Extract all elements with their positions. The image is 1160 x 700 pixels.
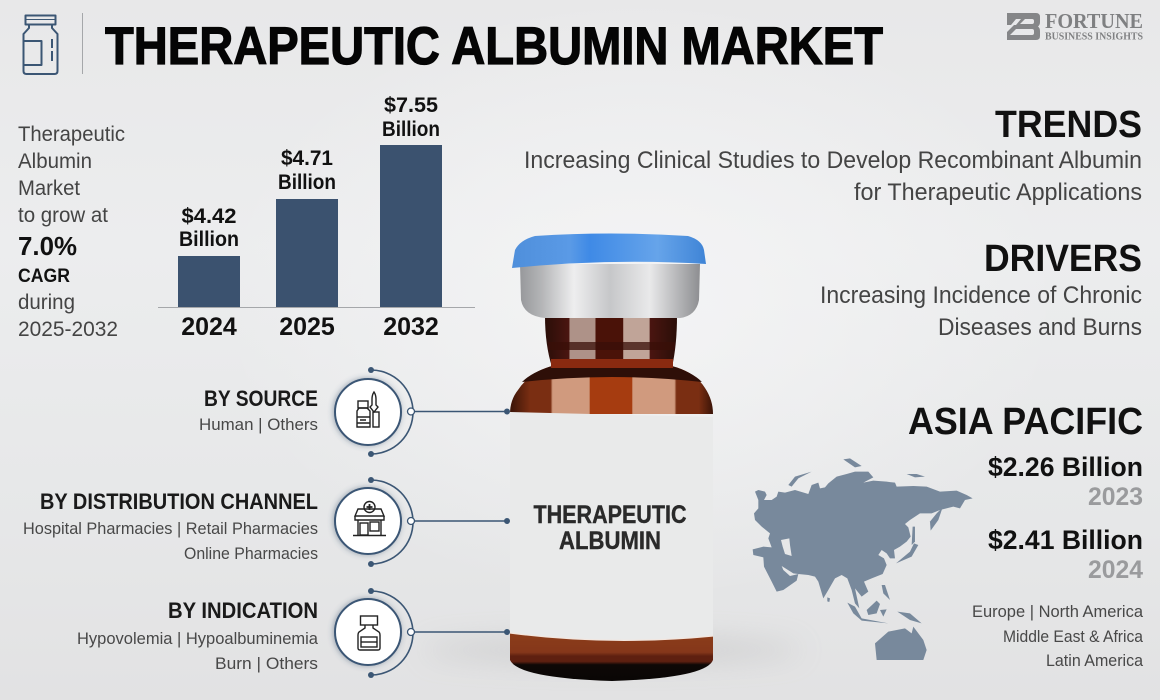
header divider [82,13,83,74]
icon: vial and ampoule [357,392,379,427]
trends [524,104,1142,206]
bar chart: $4.71 [281,147,333,170]
bottle base [510,628,713,681]
logo: Fortune Business Insights: BUSINESS INSIGHTS [1045,32,1143,42]
drivers [820,238,1142,341]
map: Asia Pacific [753,458,973,660]
segment: by source [199,367,510,457]
asia pacific stats: Middle East & Africa [1003,627,1143,646]
bar chart: 2024 [181,313,237,341]
bottle [510,234,713,681]
CAGR text block [18,123,125,341]
drivers: Increasing Incidence of Chronic [820,282,1142,309]
asia pacific stats: Latin America [1046,651,1144,670]
icon: medicine bottle [358,616,380,650]
bottle label text: THERAPEUTIC [534,501,686,529]
bottle label text: ALBUMIN [559,527,661,555]
logo: Fortune Business Insights [1007,9,1143,42]
segment: by indication: Hypovolemia | Hypoalbuminemia [77,629,319,648]
CAGR text block: Albumin [18,150,92,173]
segment: by distribution channel: BY DISTRIBUTION CHANNEL [40,489,318,514]
CAGR text block: 2025-2032 [18,318,118,341]
asia pacific stats: ASIA PACIFIC [908,401,1143,443]
icon: jar [24,16,58,74]
CAGR text block: to grow at [18,204,108,227]
bar chart: Billion [278,171,336,194]
segment: by source: BY SOURCE [204,386,318,411]
asia pacific stats: 2023 [1088,483,1143,511]
title: THERAPEUTIC ALBUMIN MARKET [105,17,883,76]
logo: Fortune Business Insights: FORTUNE [1045,9,1143,33]
drivers: Diseases and Burns [938,314,1142,341]
bar chart: Billion [179,228,239,251]
silver crimp [520,264,700,318]
drivers: DRIVERS [984,238,1142,280]
segment: by source: Human | Others [199,415,318,434]
bar chart: $4.42 [182,205,236,228]
trends: Increasing Clinical Studies to Develop Recombinant Albumin [524,147,1142,174]
segment: by indication: Burn | Others [215,654,318,673]
icon: pharmacy store [353,502,386,536]
trends: TRENDS [995,104,1142,146]
bar chart: $7.55 [384,94,438,117]
segment: by indication: BY INDICATION [168,598,318,623]
asia pacific stats [908,401,1144,670]
CAGR text block: Therapeutic [18,123,125,146]
segment: by distribution channel: Online Pharmacies [184,544,318,563]
bar chart: 2025 [279,313,335,341]
bottle shoulder [510,366,713,414]
bar chart [158,94,475,341]
bar chart: Billion [382,118,440,141]
bottle label [510,412,713,640]
bottle neck [545,316,677,367]
CAGR text block: Market [18,177,80,200]
segment: by indication [77,588,510,678]
CAGR text block: CAGR [18,266,70,287]
asia pacific stats: Europe | North America [972,602,1144,621]
blue cap [512,234,706,268]
bottle label text [534,501,686,555]
segment: by distribution channel [23,477,510,567]
segment: by distribution channel: Hospital Pharmacies | Retail Pharmacies [23,519,318,538]
asia pacific stats: $2.26 Billion [988,452,1143,482]
asia pacific stats: $2.41 Billion [988,525,1143,555]
CAGR text block: during [18,291,75,314]
trends: for Therapeutic Applications [854,179,1142,206]
CAGR text block: 7.0% [18,231,77,261]
asia pacific stats: 2024 [1088,556,1143,584]
bar chart: 2032 [383,313,439,341]
